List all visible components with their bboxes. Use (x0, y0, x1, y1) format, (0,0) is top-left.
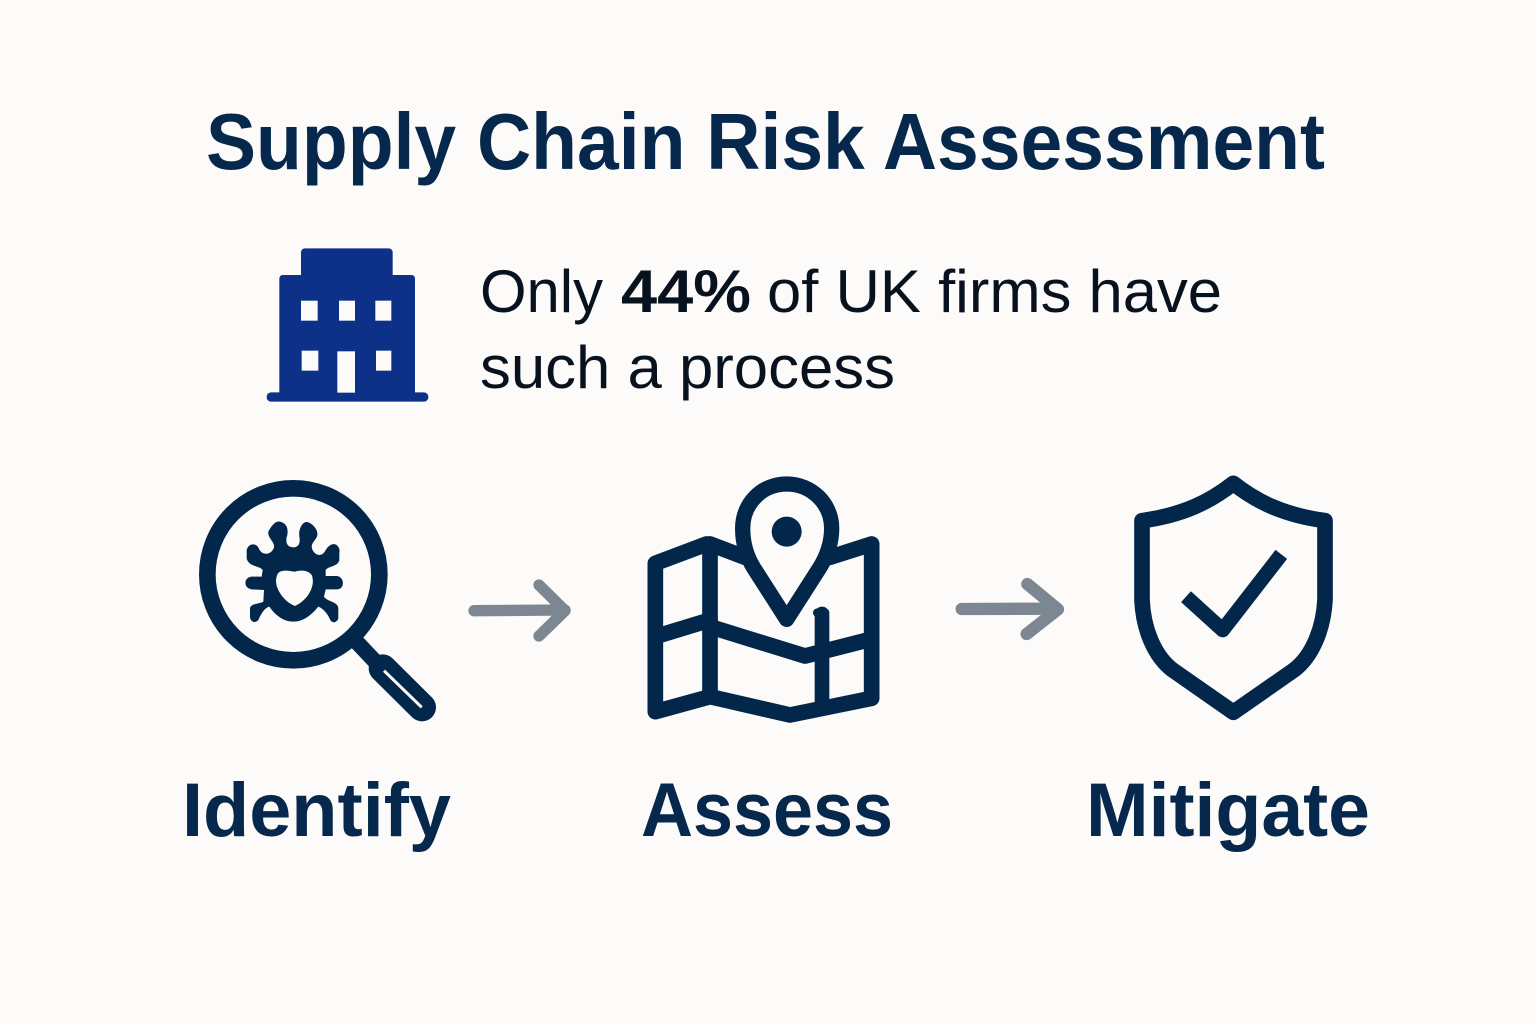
statistic text: Only (480, 258, 603, 325)
label: assess: Assess (641, 768, 893, 853)
statistic text (480, 258, 1222, 401)
statistic text: 44% (621, 258, 751, 325)
label: mitigate: Mitigate (1086, 768, 1370, 853)
arrow: assess to mitigate (962, 584, 1058, 634)
label: identify: Identify (182, 768, 451, 853)
statistic text: of UK firms have (767, 258, 1222, 325)
statistic text: such a process (480, 334, 895, 401)
pin (743, 484, 832, 619)
icon: map with pin (655, 484, 872, 715)
icon: building (267, 248, 428, 402)
arrow: identify to assess (474, 585, 565, 636)
bug (245, 521, 343, 622)
title: Supply Chain Risk Assessment (206, 97, 1325, 186)
icon: shield with check (1142, 483, 1325, 712)
icon: magnifying glass with bug (207, 488, 422, 707)
